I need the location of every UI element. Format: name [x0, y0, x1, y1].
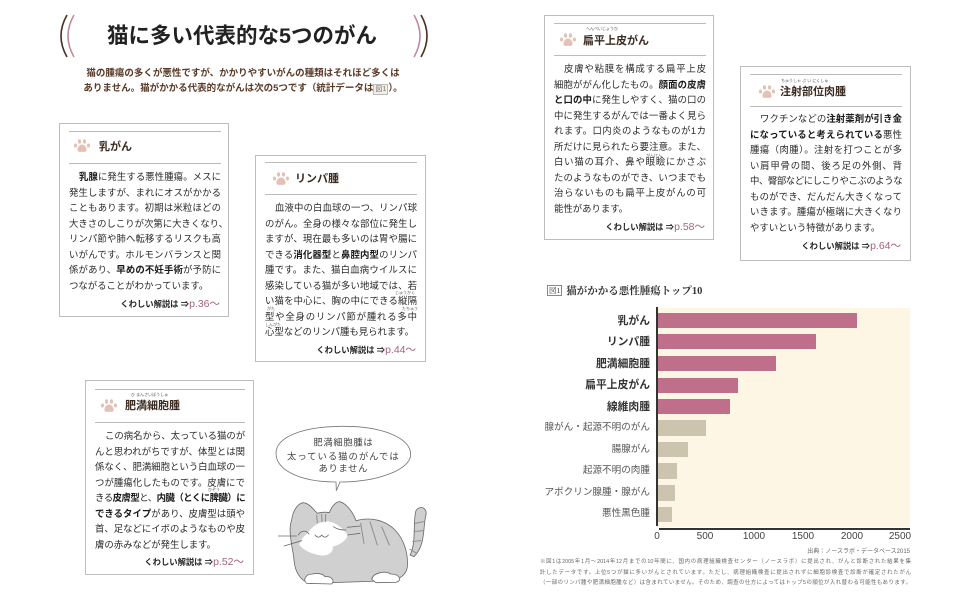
bar chart: 腸腺がん: [612, 444, 650, 455]
speech bubble: 肥満細胞腫は: [313, 436, 373, 447]
body text: 中、臀部などにしこりやこぶのような: [750, 175, 902, 186]
heading: 扁平上皮がん: [583, 35, 649, 47]
body text: 首、足などにイボのようなものや皮: [95, 523, 245, 534]
speech bubble: [276, 426, 411, 491]
page link: くわしい解説は ⇒p.52〜: [144, 556, 244, 568]
bar chart: リンパ腫: [607, 336, 650, 348]
page link: くわしい解説は ⇒p.36〜: [120, 298, 220, 310]
icon: paw: [758, 85, 776, 98]
chart title: 猫がかかる悪性腫瘍トップ10: [566, 286, 702, 297]
body text: 大きさのしこりが次第に大きくなり、: [69, 218, 228, 229]
intro text: 図1: [375, 86, 386, 93]
body text: 感染している猫が多い地域では、若: [265, 280, 417, 291]
body text: 能性があります。: [554, 203, 628, 214]
intro text: ありません。猫がかかる代表的ながんは次の5つです（統計データは ）。: [83, 83, 403, 94]
body text: 係があり、早めの不妊手術が予防に: [69, 264, 221, 275]
chart title: 図1: [549, 286, 560, 295]
body text: れます。口内炎のようなものが1カ: [554, 125, 706, 136]
heading: 注射部位肉腫: [780, 86, 846, 98]
body text: 乳腺に発生する悪性腫瘍。メスに: [79, 171, 221, 182]
furigana: ひ まんさいぼうしゅ: [131, 392, 168, 397]
icon: paw: [560, 33, 576, 46]
bar chart: 肥満細胞腫: [596, 358, 650, 370]
panel: 肥満細胞腫: [85, 380, 254, 575]
body text: ものができ、だんだん大きくなって: [750, 191, 902, 202]
furigana: 脾臓: ひぞう: [208, 487, 220, 492]
body text: リンパ節や肺へ転移するリスクも高: [69, 233, 221, 244]
speech bubble: 太っている猫のがんでは: [287, 450, 400, 461]
furigana: 心型: しんがた: [265, 322, 281, 327]
body text: いがんです。ホルモンバランスと関: [69, 249, 221, 260]
body text: こともあります。初期は米粒ほどの: [69, 202, 221, 213]
heading: 乳がん: [99, 141, 132, 153]
body text: きる皮膚型と、内臓（とくに脾臓）に: [95, 492, 245, 503]
plot background: [656, 308, 910, 527]
body text: 腫です。また、猫白血病ウイルスに: [265, 264, 417, 275]
page link: くわしい解説は ⇒p.58〜: [605, 221, 705, 233]
title with decorative brackets: 猫に多い代表的な5つのがん: [107, 24, 377, 48]
heading: リンパ腫: [295, 173, 339, 185]
body text: [554, 63, 706, 214]
body text: つながることがわかっています。: [69, 280, 208, 291]
body text: ワクチンなどの注射薬剤が引き金: [760, 113, 902, 124]
bar chart: 2500: [889, 531, 911, 542]
body text: ますが、現在最も多いのは胃や腸に: [265, 233, 417, 244]
bar chart: アポクリン腺腫・腺がん: [544, 487, 650, 498]
footnote: [540, 558, 911, 586]
bar chart: 1500: [792, 531, 814, 542]
page link: くわしい解説は ⇒p.44〜: [316, 344, 416, 356]
furigana: 眼瞼: がんけん: [646, 153, 662, 158]
icon: paw: [100, 399, 118, 412]
source: 出典：ノースラボ・データベース2015: [807, 549, 910, 555]
axis labels: 0: [654, 531, 660, 542]
illustration: cat with speech bubble: [276, 426, 427, 584]
bar chart: 2000: [841, 531, 863, 542]
body text: いきます。腫瘍が極端に大きくなり: [750, 206, 902, 217]
body text: できるタイプがあり、皮膚型は頭や: [95, 508, 245, 519]
furigana: ちゅうしゃ ぶ い にくしゅ: [781, 78, 828, 83]
body text: 治らないものも扁平上皮がんの可: [554, 187, 706, 198]
body text: 係なく、肥満細胞という白血球の一: [95, 461, 245, 472]
page link: くわしい解説は ⇒p.64〜: [801, 240, 901, 252]
body text: 中に発生するがんでは一番よく見ら: [554, 110, 706, 121]
bar chart: 線維肉腫: [607, 401, 650, 413]
body text: んと思われがちですが、体型とは関: [95, 446, 245, 457]
body text: 発生しますが、まれにオスがかかる: [69, 187, 221, 198]
body text: い猫を中心に、胸の中にできる縦隔: [265, 295, 417, 306]
title with decorative brackets: [60, 14, 428, 58]
body text: [750, 113, 902, 233]
bar chart: 扁平上皮がん: [585, 379, 650, 391]
body text: [95, 430, 245, 550]
body text: やすいという特徴があります。: [750, 222, 880, 233]
bar chart: 1000: [743, 531, 765, 542]
body text: のがん。全身の様々な部位に発生し: [265, 218, 417, 229]
furigana: へんぺいじょうひ: [586, 26, 618, 31]
intro text: [83, 67, 403, 95]
panel: 扁平上皮がん: [544, 15, 714, 240]
heading: 肥満細胞腫: [125, 400, 180, 412]
body text: 膚の赤みなどが発生します。: [95, 539, 216, 550]
bar chart: 起源不明の肉腫: [583, 465, 650, 476]
bar chart: 500: [697, 531, 713, 542]
bar chart: 腺がん・起源不明のがん: [544, 422, 650, 433]
body text: 所だけに見られたら要注意。また、: [554, 141, 706, 152]
body text: になっていると考えられている悪性: [750, 129, 902, 140]
body text: [265, 202, 417, 337]
body text: できる消化器型と鼻腔内型のリンパ: [265, 249, 417, 260]
body text: い肩甲骨の間、後ろ足の外側、背: [750, 160, 902, 171]
body text: この病名から、太っている猫のが: [105, 430, 245, 441]
body text: 型や全身のリンパ節が腫れる多中: [265, 311, 417, 322]
axes: [656, 307, 658, 526]
panel: 乳がん: [59, 123, 229, 317]
bar chart: 悪性黒色腫: [602, 508, 650, 519]
body text: つが腫瘍化したものです。皮膚にで: [95, 477, 245, 488]
body text: 細胞ががん化したもの。顔面の皮膚: [554, 79, 706, 90]
panel: 注射部位肉腫: [740, 66, 911, 261]
body text: 腫瘍（肉腫）。注射を打つことが多: [750, 144, 902, 155]
icon: paw: [74, 139, 90, 152]
icon: paw: [272, 172, 290, 185]
category labels: 乳がん: [618, 315, 650, 327]
body text: [69, 171, 228, 291]
body text: 心型などのリンパ腫も見られます。: [265, 326, 414, 337]
footnote: 計したデータです。上位5つが猫に多いがんとされています。ただし、病理組織検査に提出されずに細胞診検査で診断が確定されたがん: [540, 570, 911, 576]
body text: と口の中に発生しやすく、猫の口の: [554, 94, 706, 105]
furigana: 縦隔: じゅうかく: [395, 290, 415, 295]
cat: [278, 502, 426, 584]
body text: 皮膚や粘膜を構成する扁平上皮: [564, 63, 706, 74]
speech bubble: ありません: [318, 464, 368, 474]
body text: 血液中の白血球の一つ、リンパ球: [275, 202, 417, 213]
footnote: （一部のリンパ腫や肥満細胞腫など）は含まれていません。そのため、調査の仕方によってはトップ5の順位が入れ替わる可能性もあります。: [540, 580, 911, 586]
bars: [657, 313, 857, 328]
furigana: 多中: たちゅう: [402, 306, 418, 311]
body text: 白い猫の耳介、鼻や眼瞼にかさぶ: [554, 156, 706, 167]
panel: リンパ腫: [255, 155, 426, 362]
body text: たのようなものができ、いつまでも: [554, 172, 706, 183]
furigana: 型: がた: [267, 306, 275, 311]
footnote: ※図1は2005年1月〜2014年12月までの10年間に、国内の病理組織検査センター（ノースラボ）に提出され、がんと診断された結果を集: [540, 559, 911, 565]
intro text: 猫の腫瘍の多くが悪性ですが、かかりやすいがんの種類はそれほど多くは: [86, 68, 400, 79]
